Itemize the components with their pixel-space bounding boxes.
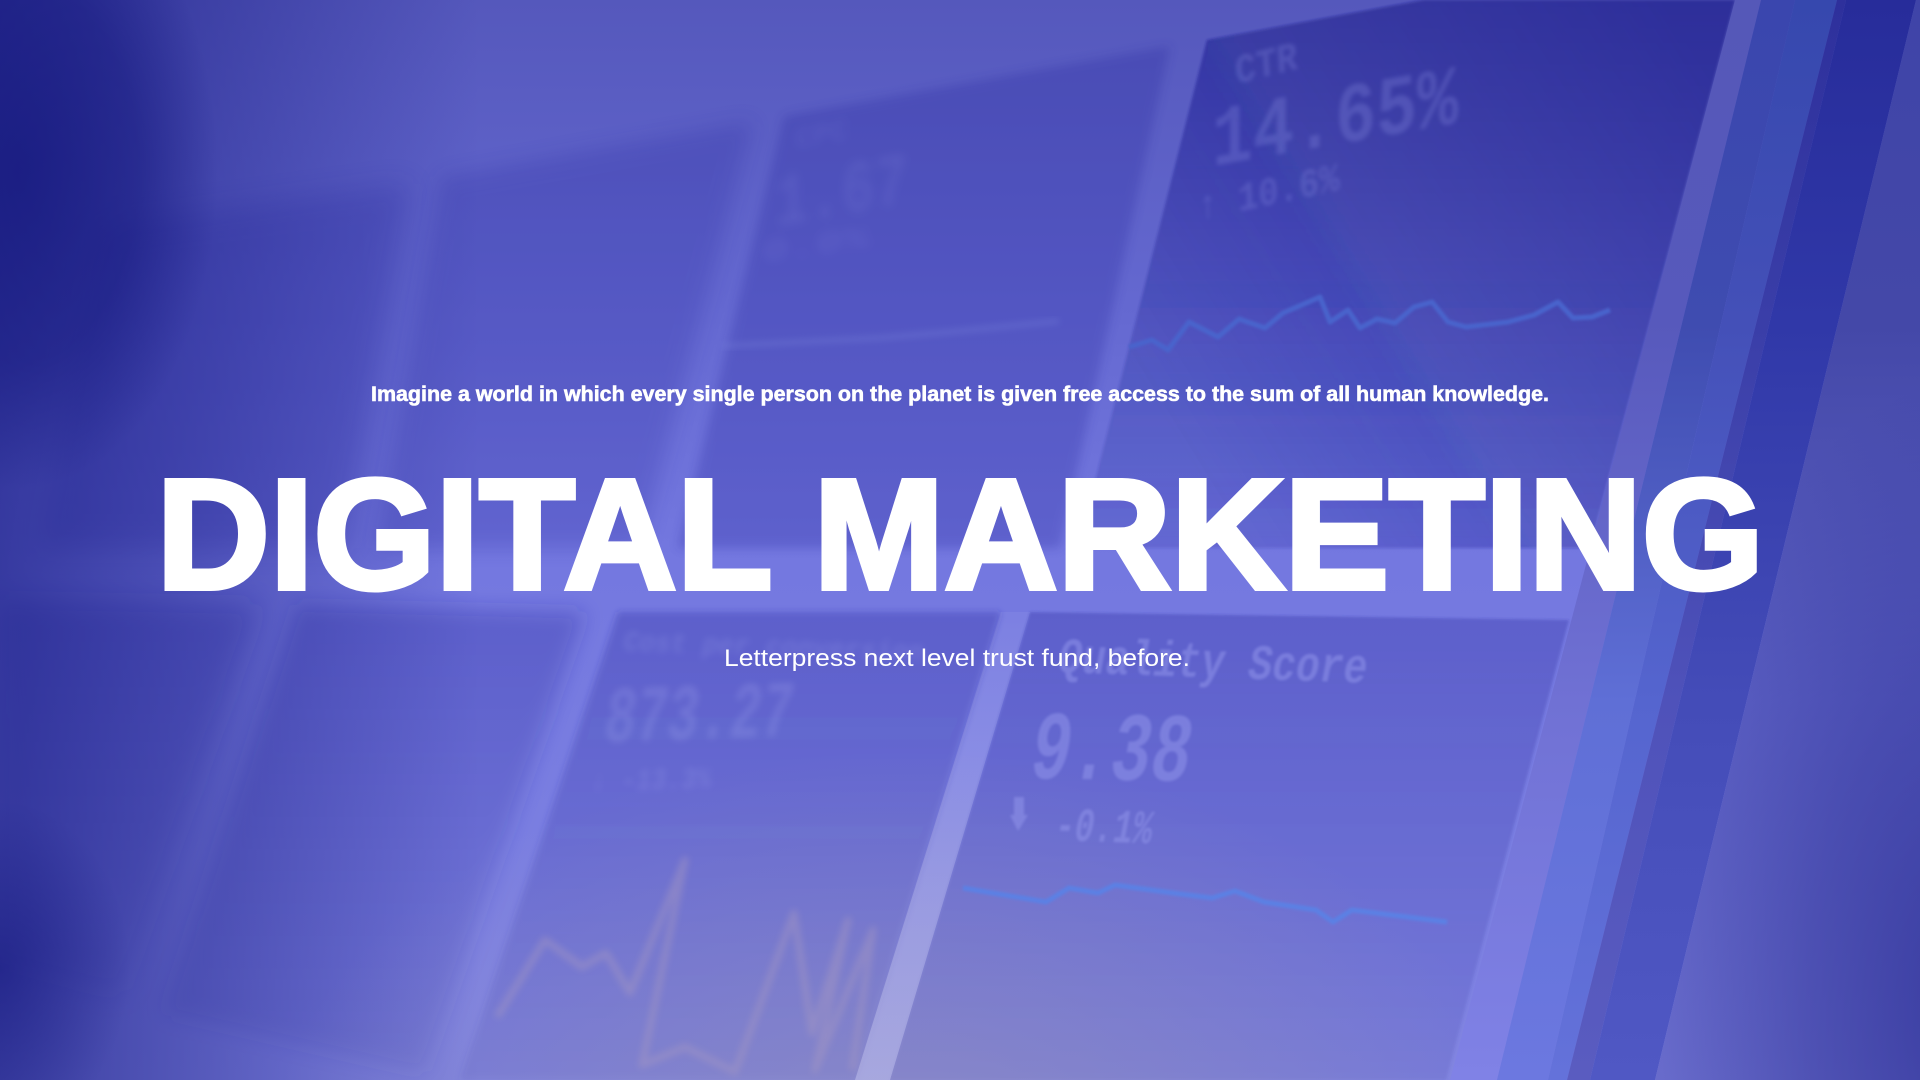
screen readout: cost per conversion: ↓ -13.3% [588,764,714,800]
bright frame bar between lower screens [855,612,1030,1080]
screen readout: CTR: 14.65% [1212,53,1458,192]
screen readout: quality score [1022,632,1373,858]
tagline: Imagine a world in which every single person on the planet is given free access to the sum of all human knowledge. [371,383,1549,406]
sparkline: quality score screen [963,885,1447,922]
sparkline: CPC screen [722,321,1059,346]
title: DIGITAL MARKETING [156,448,1764,622]
screen readout: CPC: 0.0% [762,220,871,272]
screen readout: cost per conversion: Cost per conversion [620,628,926,669]
screen readout: quality score: -0.1% [1050,800,1158,858]
screen readout: CPC: CPC [795,114,848,158]
warm glow at bottom centre [200,650,1500,1080]
subtitle: Letterpress next level trust fund, before. [724,645,1190,672]
icon: down arrow [1010,797,1028,831]
screen readout: CTR: ↑ 10.6% [1197,156,1341,233]
screen readout: quality score: Quality Score [1053,632,1373,699]
sparkline: cost per conversion screen [497,860,873,1072]
monitor edge stripes [1450,0,1916,1080]
screen readout: CPC [762,114,908,272]
screen readout: CTR: CTR [1234,35,1300,97]
lower dashboard screens [0,600,1569,1080]
screen readout: CTR [1197,35,1458,233]
screen readout: CPC: 1.67 [775,141,908,249]
screen readout: cost per conversion [588,628,926,800]
left edge shading [0,0,480,1080]
screen readout: quality score: 9.38 [1022,697,1201,811]
upper dashboard screens [40,0,1735,548]
right background panel [1655,0,1920,1080]
sparkline: CTR screen [1129,297,1610,350]
screen readout: cost per conversion: 873.27 [598,670,799,767]
